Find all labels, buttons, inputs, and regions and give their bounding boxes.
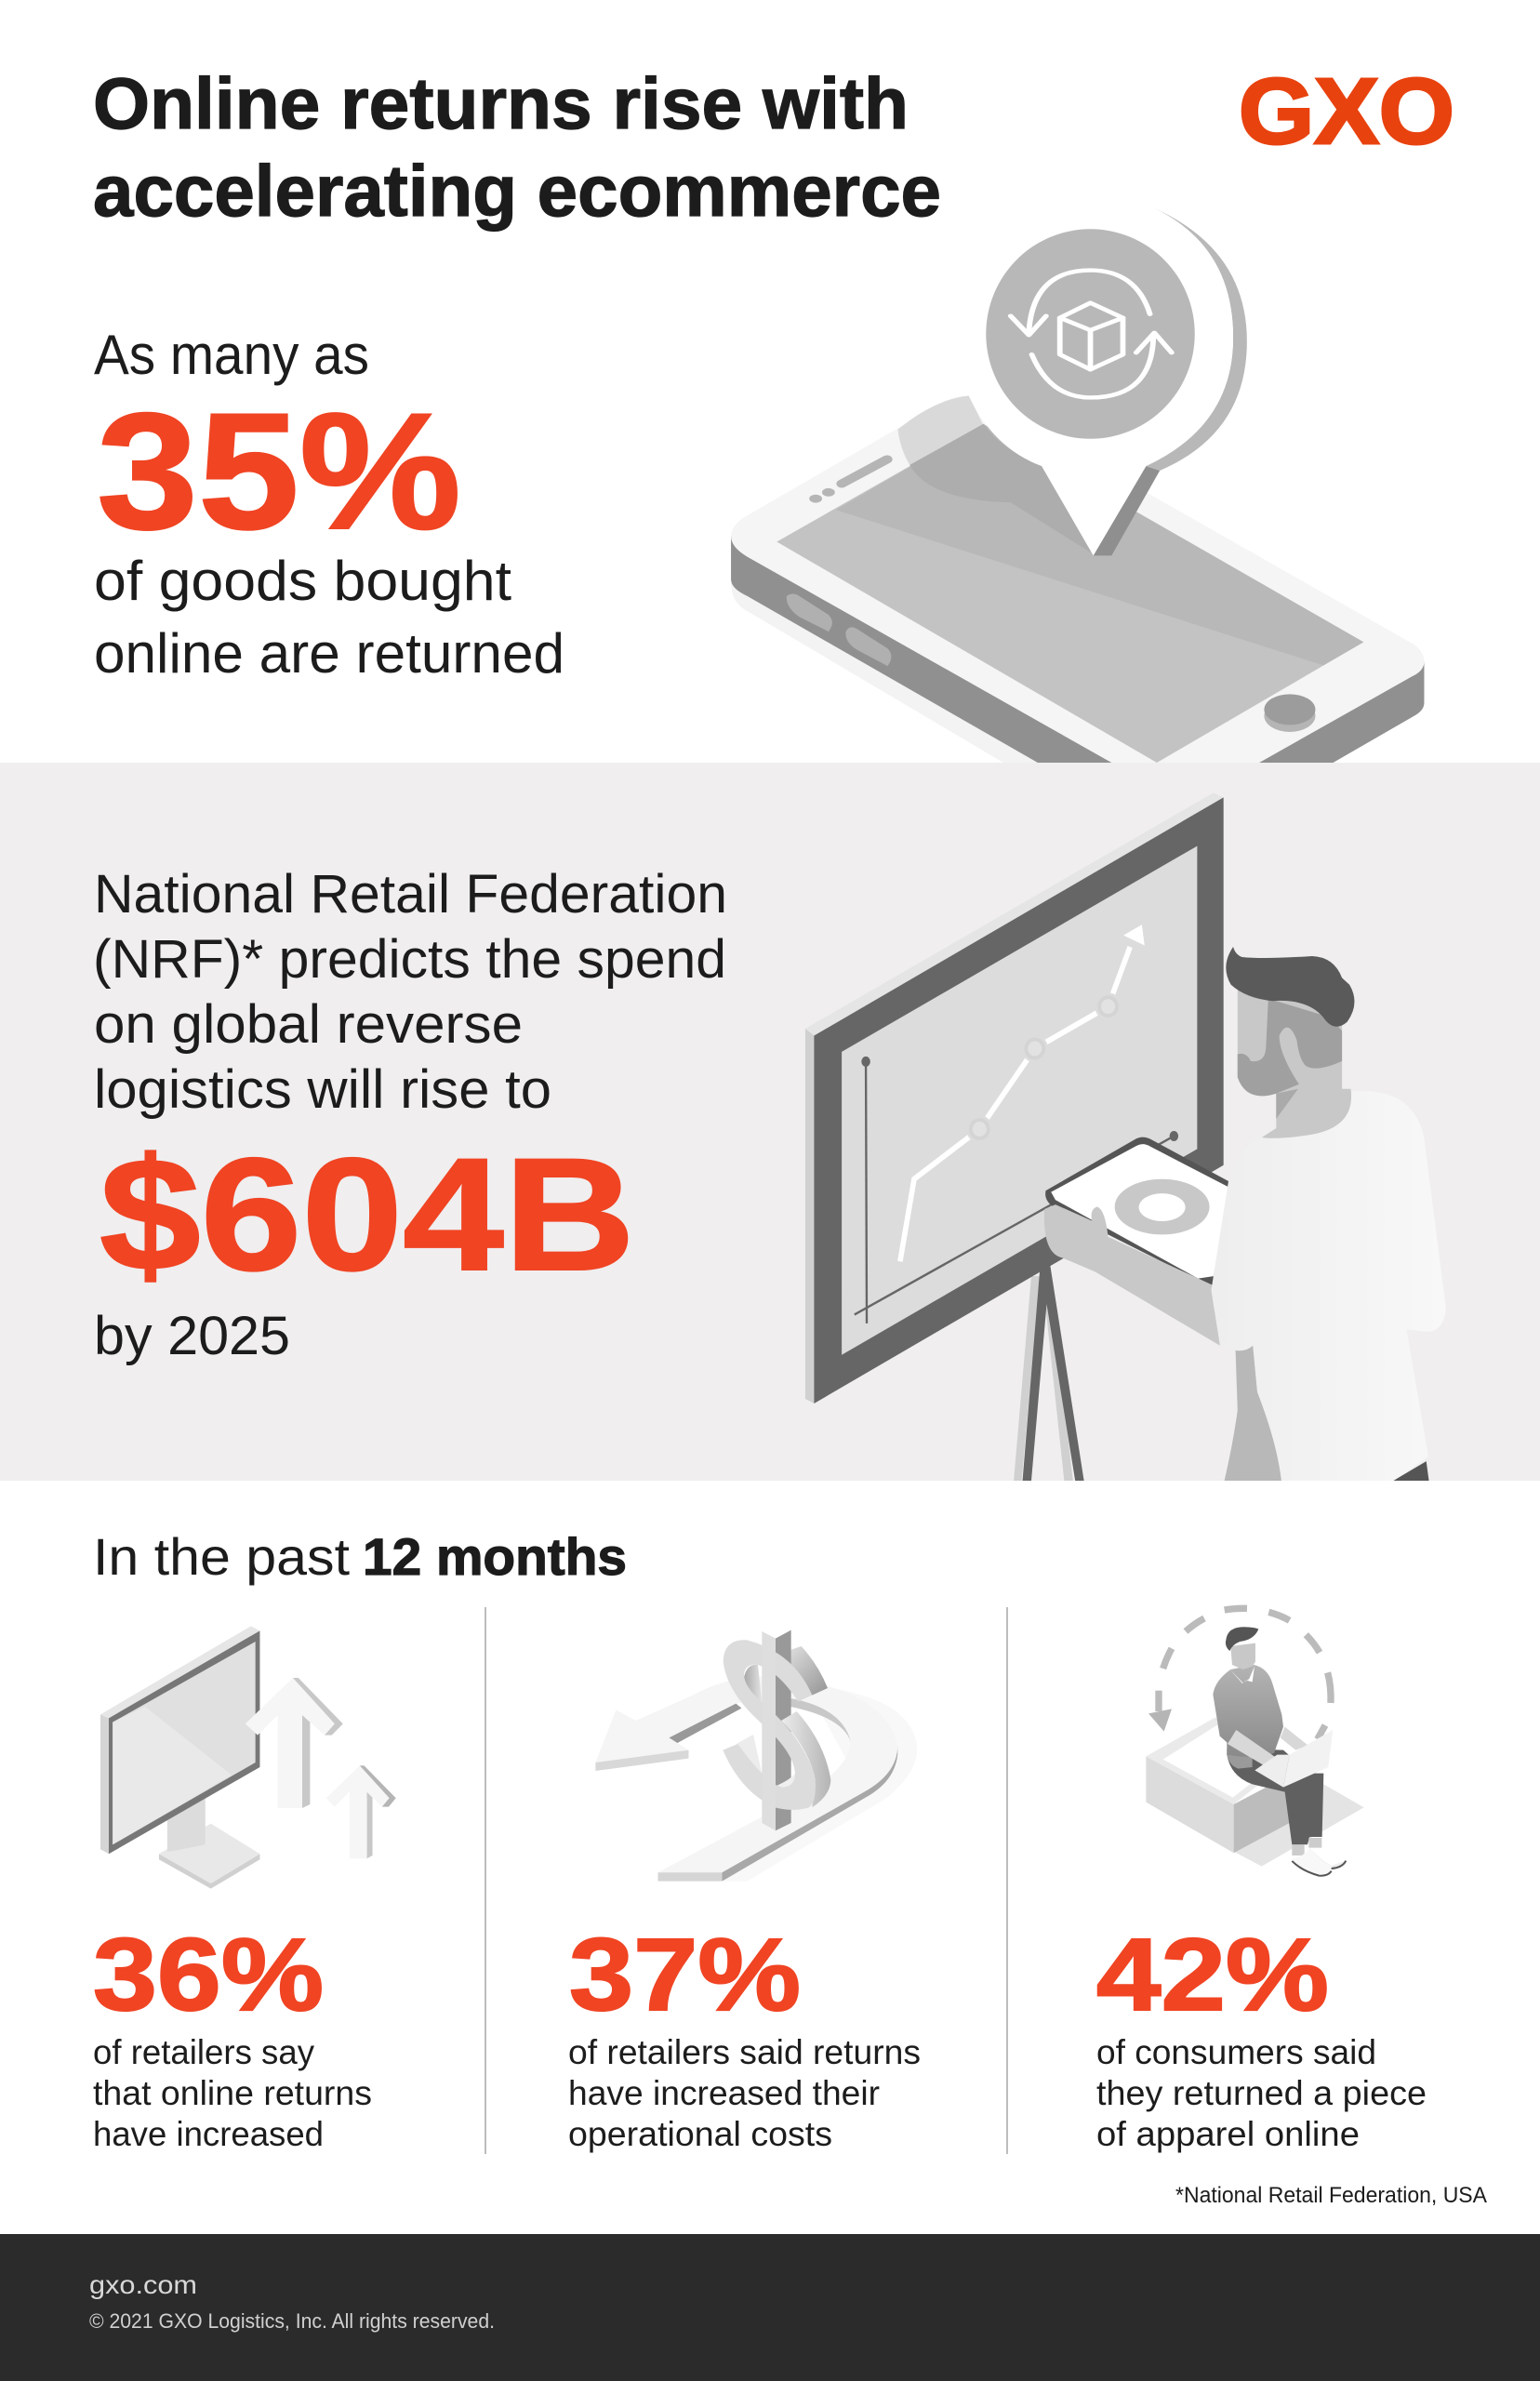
text block: NRF forecast: logistics will rise to — [94, 1059, 551, 1120]
arm — [1044, 1204, 1220, 1346]
footer: gxo.com — [89, 2270, 197, 2299]
text block: NRF forecast — [93, 864, 727, 1366]
title: Online returns rise with — [93, 62, 909, 144]
man — [1213, 1627, 1346, 1876]
small arrow — [326, 1765, 396, 1858]
stat block: 35 percent: of goods bought — [94, 550, 511, 612]
footnote: *National Retail Federation, USA — [1175, 2183, 1487, 2208]
illustration: phone with return pin — [731, 200, 1424, 763]
box — [1146, 1718, 1293, 1853]
panel: middle grey band — [0, 763, 1540, 1481]
stat: 37 percent: operational costs — [568, 2115, 832, 2153]
footer — [0, 2234, 1540, 2381]
stat: 36 percent: have increased — [93, 2115, 324, 2153]
title — [93, 62, 941, 232]
text block: NRF forecast: on global reverse — [94, 994, 523, 1055]
footer: © 2021 GXO Logistics, Inc. All rights reserved. — [89, 2309, 495, 2333]
stat block: 35 percent: 35% — [97, 379, 461, 564]
stat: 37 percent: of retailers said returns — [568, 2033, 921, 2071]
stat: 36 percent: 36% — [93, 1918, 324, 2032]
stat: 36 percent: that online returns — [93, 2074, 372, 2112]
stat block: 35 percent: online are returned — [94, 622, 564, 685]
stat: 36 percent — [93, 1918, 372, 2153]
phone screen — [777, 424, 1363, 763]
icon: man sitting on box with laptop — [1146, 1608, 1364, 1876]
stat: 42 percent: of apparel online — [1096, 2115, 1360, 2153]
stat: 37 percent: 37% — [569, 1918, 801, 2032]
heading: in the past 12 months — [93, 1527, 627, 1586]
text block: NRF forecast: National Retail Federation — [94, 864, 727, 924]
stat: 42 percent: of consumers said — [1096, 2033, 1376, 2071]
dollar sign — [723, 1630, 851, 1830]
stat: 42 percent: they returned a piece — [1096, 2074, 1427, 2112]
icon: dollar with return arrow — [595, 1630, 917, 1882]
stat: 37 percent: have increased their — [568, 2074, 880, 2112]
text block: NRF forecast: $604B — [100, 1125, 635, 1304]
text block: NRF forecast: (NRF)* predicts the spend — [93, 929, 726, 990]
stat: 37 percent — [568, 1918, 921, 2153]
trousers — [1225, 1346, 1429, 1481]
heading: in the past 12 months: In the past — [93, 1527, 350, 1586]
line chart — [855, 924, 1178, 1324]
chart board — [805, 792, 1224, 1403]
large arrow — [246, 1678, 343, 1808]
phone home button — [1264, 694, 1315, 732]
heading: in the past 12 months: 12 months — [363, 1527, 627, 1586]
phone side buttons — [787, 593, 891, 666]
stat: 42 percent — [1096, 1918, 1427, 2153]
stat block: 35 percent — [94, 324, 564, 685]
icon: box with return arrows — [1011, 271, 1172, 397]
illustration: man presenting at chart board — [805, 792, 1446, 1481]
stat: 36 percent: of retailers say — [93, 2033, 314, 2071]
title: accelerating ecommerce — [93, 150, 941, 232]
stat: 42 percent: 42% — [1096, 1918, 1329, 2032]
stat block: 35 percent: As many as — [94, 324, 369, 386]
icon: monitor with up arrows — [100, 1626, 396, 1889]
head and beard — [1226, 947, 1354, 1138]
tablet — [1045, 1137, 1233, 1288]
logo: GXO: GXO — [1239, 60, 1454, 164]
location pin — [954, 200, 1247, 555]
curved return arrow — [595, 1677, 917, 1882]
phone speaker and camera — [809, 459, 887, 503]
board legs — [1014, 1262, 1084, 1481]
text block: NRF forecast: by 2025 — [94, 1306, 290, 1366]
shirt — [1211, 1091, 1446, 1481]
dashed return arrow — [1148, 1608, 1331, 1739]
